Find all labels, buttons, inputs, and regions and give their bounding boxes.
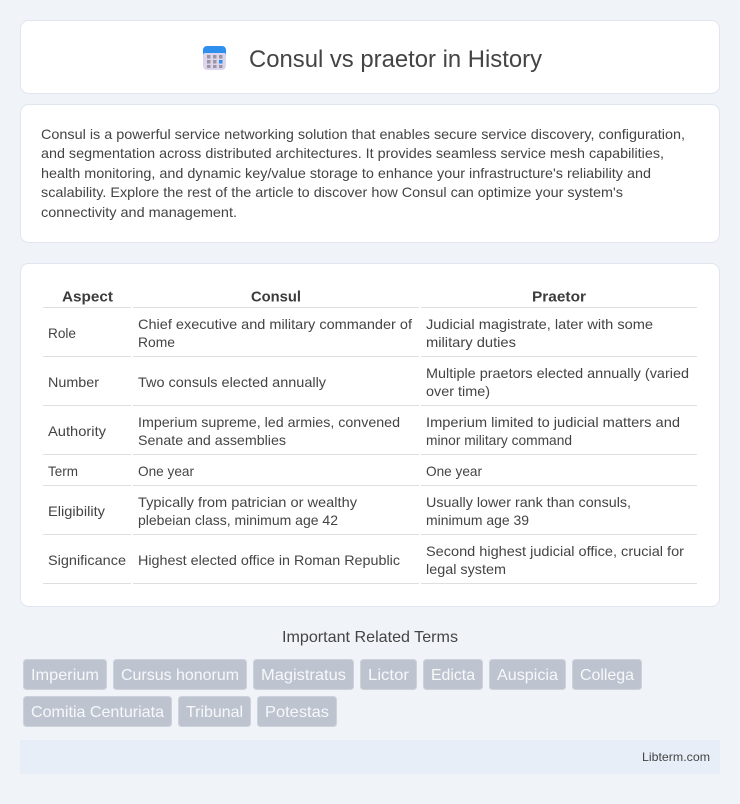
row: Number: Multiple praetors elected annually (varied — [426, 365, 689, 381]
table header — [62, 288, 586, 306]
tags: Potestas — [265, 704, 329, 721]
row: Term: One year — [138, 463, 194, 479]
row: Eligibility: plebeian class, minimum age 42 — [138, 512, 338, 528]
tags: Auspicia — [497, 667, 558, 684]
panel: intro — [20, 104, 720, 242]
title: Consul vs praetor in History — [249, 46, 542, 73]
row: Number: Two consuls elected annually — [138, 374, 326, 390]
intro text: connectivity and management. — [41, 204, 237, 220]
row: Significance: Second highest judicial office, crucial for — [426, 543, 684, 559]
row: Significance: Highest elected office in Roman Republic — [138, 552, 400, 568]
row: Significance — [48, 543, 684, 577]
row: Eligibility — [48, 494, 631, 528]
tags: Lictor — [368, 667, 410, 684]
panel: comparison table — [20, 264, 720, 606]
row: Authority: Authority — [48, 423, 106, 439]
row: Role: Judicial magistrate, later with some — [426, 316, 653, 332]
row: Authority: Senate and assemblies — [138, 432, 286, 448]
row: Role: Chief executive and military commander of — [138, 316, 412, 332]
row: Role: Role — [48, 325, 76, 341]
footer: Libterm.com — [642, 750, 710, 764]
table header: Consul — [251, 288, 301, 306]
row: Term: Term — [48, 463, 78, 479]
intro text: Consul is a powerful service networking solution that enables secure service discovery, configuration, — [41, 126, 685, 142]
row: Role: Rome — [138, 334, 175, 350]
row: Eligibility: Typically from patrician or wealthy — [138, 494, 357, 510]
intro text — [41, 126, 685, 220]
row: Authority: Imperium limited to judicial matters and — [426, 414, 680, 430]
tags: Magistratus — [261, 667, 346, 684]
row: Role: military duties — [426, 334, 516, 350]
tags: Tribunal — [186, 704, 243, 721]
intro text: scalability. Explore the rest of the article to discover how Consul can optimize your system's — [41, 184, 623, 200]
tags — [24, 660, 642, 726]
row: Term — [48, 463, 482, 479]
row: Number: Number — [48, 374, 99, 390]
table header: Aspect — [62, 288, 113, 306]
tags: Cursus honorum — [121, 667, 239, 684]
row: Authority: Imperium supreme, led armies, convened — [138, 414, 400, 430]
intro text: health monitoring, and dynamic key/value storage to enhance your infrastructure's reliability and — [41, 165, 651, 181]
row: Eligibility: Eligibility — [48, 503, 105, 519]
heading: important related terms: Important Related Terms — [282, 629, 458, 646]
row: Authority — [48, 414, 680, 448]
row: Role — [48, 316, 653, 350]
row: Number: over time) — [426, 383, 490, 399]
tags: Imperium — [31, 667, 99, 684]
row: Eligibility: minimum age 39 — [426, 512, 529, 528]
row: Eligibility: Usually lower rank than consuls, — [426, 494, 631, 510]
row: Significance: Significance — [48, 552, 126, 568]
tags: Collega — [580, 667, 634, 684]
row: Number — [48, 365, 689, 399]
footer — [20, 740, 720, 774]
row: Authority: minor military command — [426, 432, 572, 448]
icon: calendar — [203, 46, 226, 70]
tags: Edicta — [431, 667, 475, 684]
row: Term: One year — [426, 463, 482, 479]
table header: Praetor — [532, 288, 586, 306]
panel: header — [20, 20, 720, 94]
tags: Comitia Centuriata — [31, 704, 164, 721]
row: Significance: legal system — [426, 561, 506, 577]
intro text: and segmentation across distributed architectures. It provides seamless service mesh capabilities, — [41, 145, 664, 161]
